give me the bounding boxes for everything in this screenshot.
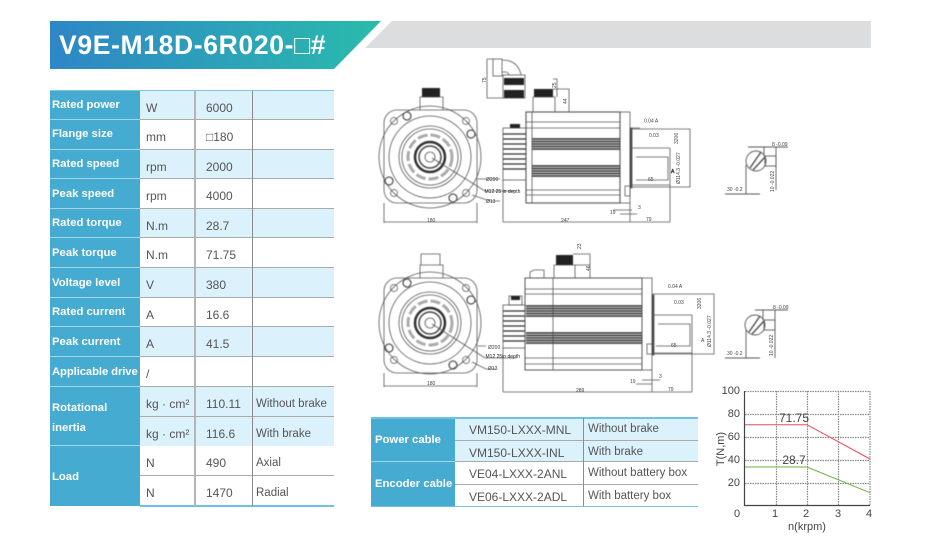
row: VE06 2ADL	[469, 490, 671, 504]
specification table: N	[146, 456, 155, 470]
label: upper front dimensions: M12 25 in depth	[484, 189, 521, 195]
row: VE04 2ANL	[455, 462, 698, 484]
row: voltage level	[50, 268, 334, 298]
specification table: Rated power	[52, 99, 120, 111]
label: lower side dimensions: 79	[668, 387, 674, 393]
chart axis numbers: 20	[728, 477, 740, 489]
specification table: Peak speed	[52, 188, 114, 200]
specification table: A	[146, 308, 154, 322]
label: upper front dimensions: 180	[427, 218, 436, 224]
row: peak current	[50, 327, 334, 357]
label: upper side dimensions: 3206	[674, 133, 680, 144]
specification table: N	[146, 486, 155, 500]
chart axis numbers: 100	[722, 385, 740, 397]
specification table: Rated speed	[52, 158, 119, 170]
row: load	[50, 446, 334, 506]
specification table: Flange size	[52, 128, 113, 140]
label: lower side dimensions: 3	[659, 374, 662, 380]
specification table: mm	[146, 130, 166, 144]
specification table: /	[146, 366, 149, 380]
chart axis numbers: 0	[734, 508, 740, 520]
specification table	[50, 90, 334, 507]
label: upper side dimensions: 0.04 A	[644, 118, 659, 124]
x axis title: n(krpm)	[788, 521, 826, 533]
row: rated torque	[50, 209, 334, 238]
label: upper side dimensions: 19	[610, 210, 616, 216]
drawing: key section, lower	[725, 310, 788, 358]
row: rated current	[50, 298, 334, 327]
cable table	[371, 417, 698, 507]
chart axis numbers: 3	[835, 508, 841, 520]
specification table: 2000	[206, 160, 233, 174]
row: VE04 2ANL: Without battery box	[588, 467, 687, 479]
specification table: 116.6	[206, 426, 235, 440]
label: lower side dimensions: A	[701, 338, 705, 344]
label: lower key dimensions: 8 -0.09	[773, 305, 789, 311]
label: lower side dimensions: 19	[630, 379, 636, 385]
label: upper side dimensions: 65	[648, 177, 654, 183]
specification table: inertia	[52, 422, 86, 434]
row: applicable drive	[50, 357, 334, 387]
label: upper side dimensions: 75	[482, 77, 488, 83]
label: upper side dimensions	[482, 77, 682, 224]
specification table: Radial	[256, 486, 289, 498]
label: lower side dimensions: 0.03	[674, 300, 684, 306]
row: peak torque	[50, 238, 334, 268]
label: lower side dimensions: 3206	[697, 298, 703, 309]
specification table: 71.75	[206, 248, 236, 262]
row: rotational inertia	[50, 387, 334, 446]
row: VE06 2ADL: VE06-LXXX-2ADL	[469, 490, 567, 504]
label: 28.7: 28.7	[782, 453, 806, 467]
specification table: With brake	[256, 428, 311, 440]
label: 71.75: 71.75	[779, 411, 809, 425]
specification table: 6000	[206, 100, 233, 114]
label: upper key dimensions: 10 -0.022	[770, 171, 776, 192]
label: lower side dimensions: 65	[671, 343, 677, 349]
curve: rated torque	[745, 467, 870, 493]
specification table: Voltage level	[52, 277, 120, 289]
label: upper side dimensions: A	[671, 169, 675, 175]
chart axis numbers: 80	[728, 408, 740, 420]
specification table: rpm	[146, 160, 167, 174]
specification table: 41.5	[206, 336, 229, 350]
specification table: Rated current	[52, 306, 125, 318]
row: peak speed	[50, 179, 334, 209]
specification table: Axial	[256, 456, 281, 468]
row: VM150 MNL	[455, 418, 698, 440]
specification table: 110.11	[206, 396, 241, 410]
specification table: □180	[206, 130, 233, 144]
curve: peak torque	[745, 425, 870, 459]
label: lower front dimensions: 180	[427, 381, 436, 387]
specification table: 4000	[206, 188, 233, 202]
specification table: Rotational	[52, 402, 107, 414]
row: rated power	[50, 91, 334, 120]
chart axis numbers: 4	[866, 508, 872, 520]
label: upper key dimensions: 8 -0.09	[772, 142, 788, 148]
label: encoder cable	[371, 462, 455, 506]
specification table: V	[146, 278, 154, 292]
label: lower key dimensions: 30 -0.2	[727, 351, 743, 357]
row: rated speed	[50, 150, 334, 179]
grey header band	[365, 21, 871, 48]
specification table: 1470	[206, 486, 233, 500]
specification table: N.m	[146, 218, 168, 232]
drawing: side view, upper	[487, 59, 690, 222]
specification table: Applicable drive	[52, 366, 138, 378]
label: lower side dimensions: 23	[577, 243, 583, 249]
specification table: 380	[206, 278, 226, 292]
label: upper front dimensions: Ø200	[486, 177, 498, 183]
label: lower side dimensions: 46	[586, 265, 592, 271]
specification table: 490	[206, 456, 226, 470]
label: upper key dimensions: 30 -0.2	[727, 187, 743, 193]
row: VM150 INL: With brake	[588, 446, 643, 458]
torque speed chart	[715, 391, 870, 533]
label: lower side dimensions: 0.04 A	[668, 284, 683, 290]
label: lower front dimensions: M12 25in depth	[486, 354, 520, 360]
label: upper front dimensions	[427, 177, 521, 224]
row: VE06 2ADL: With battery box	[588, 490, 671, 502]
label: upper side dimensions: Ø114.3 -0.027	[676, 152, 682, 184]
label: upper side dimensions: 25	[552, 82, 558, 88]
label: lower side dimensions: 289	[576, 388, 585, 394]
label: lower side dimensions: Ø114.3 -0.027	[707, 315, 713, 347]
drawing: front view, upper	[379, 88, 515, 223]
specification table: kg · cm²	[146, 396, 189, 410]
label: lower front dimensions: Ø200	[488, 345, 500, 351]
specification table: A	[146, 336, 154, 350]
specification table: 28.7	[206, 218, 229, 232]
title banner	[50, 21, 381, 69]
row: VM150 MNL: VM150-LXXX-MNL	[469, 423, 571, 437]
label: encoder cable: Encoder cable	[375, 478, 452, 490]
chart axis numbers: 2	[803, 508, 809, 520]
label: upper side dimensions: 0.03	[649, 133, 659, 139]
label: upper side dimensions: 79	[646, 217, 652, 223]
row: flange size	[50, 120, 334, 150]
chart axis numbers: 1	[772, 508, 778, 520]
specification table: Rated torque	[52, 217, 122, 229]
chart axis numbers: 40	[728, 454, 740, 466]
label: lower key dimensions: 10 -0.022	[769, 335, 775, 356]
specification table: N.m	[146, 248, 168, 262]
specification table: Peak current	[52, 336, 120, 348]
label: upper side dimensions: 44	[563, 98, 569, 104]
drawing: key section, upper	[725, 147, 788, 194]
specification table: 16.6	[206, 308, 229, 322]
title banner: V9E-M18D-6R020-□#	[59, 30, 326, 60]
row: VM150 INL	[455, 440, 698, 462]
label: upper side dimensions: 247	[561, 218, 570, 224]
drawing: side view, lower	[503, 254, 714, 392]
row: VM150 INL: VM150-LXXX-INL	[469, 446, 564, 460]
y axis title: T(N,m)	[715, 432, 727, 466]
label: upper key dimensions	[727, 142, 788, 193]
label: upper side dimensions: 3	[638, 205, 641, 211]
chart axis numbers: 60	[728, 431, 740, 443]
label: lower front dimensions	[427, 345, 520, 387]
specification table: kg · cm²	[146, 426, 189, 440]
label: power cable: Power cable	[375, 434, 441, 446]
label: upper front dimensions: Ø13	[486, 199, 496, 205]
drawing: front view, lower	[379, 254, 516, 387]
specification table: Peak torque	[52, 247, 117, 259]
label: lower key dimensions	[727, 305, 789, 357]
specification table: W	[146, 100, 157, 114]
specification table: rpm	[146, 188, 167, 202]
specification table: Load	[52, 471, 79, 483]
row: VE04 2ANL: VE04-LXXX-2ANL	[469, 467, 567, 481]
label: lower side dimensions	[576, 243, 713, 394]
specification table: Without brake	[256, 398, 327, 410]
label: power cable	[371, 418, 455, 462]
row: VM150 MNL: Without brake	[588, 423, 659, 435]
label: lower front dimensions: Ø13	[488, 366, 498, 372]
